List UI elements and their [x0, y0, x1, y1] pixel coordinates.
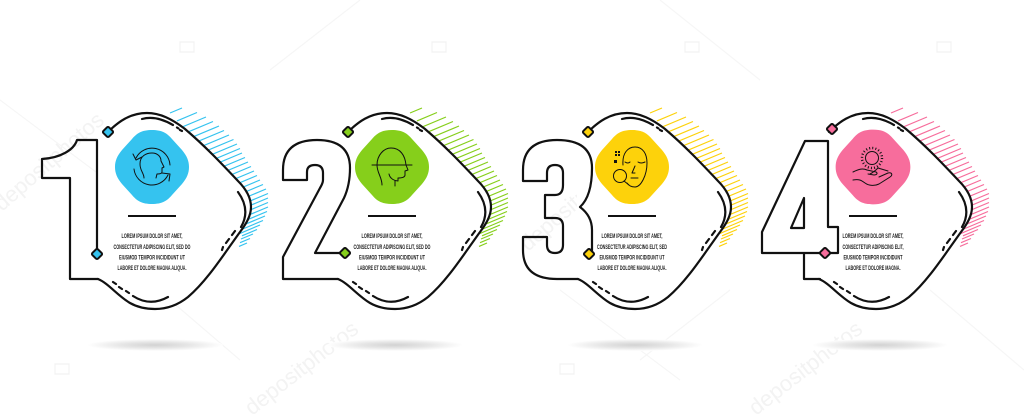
- divider: [849, 215, 897, 217]
- text block: LABORE ET DOLORE MAGNA ALIQUA.: [598, 266, 667, 272]
- text block: LABORE ET DOLORE MAGNA.: [846, 266, 901, 272]
- text block: CONSECTETUR ADIPISCING ELIT,: [842, 245, 904, 251]
- watermark: depositphotos: [515, 147, 635, 256]
- number 1: [42, 140, 98, 279]
- text block: LOREM IPSUM DOLOR SIT AMET,: [362, 234, 423, 240]
- ground shadow 1: [87, 339, 223, 351]
- ground shadow 4: [812, 339, 948, 351]
- number 3: [523, 140, 592, 279]
- icon: face rotation: [115, 130, 189, 204]
- text block: CONSECTETUR ADIPISCING ELIT, SED DO: [354, 245, 431, 251]
- text block: [597, 234, 667, 272]
- panel: step 2: [283, 108, 508, 309]
- icon: sun over hand: [836, 130, 910, 204]
- blob outline: [577, 113, 731, 309]
- icon: face with magnifier: [595, 130, 669, 204]
- panel: step 4: [762, 108, 989, 309]
- blob outline: [818, 113, 972, 309]
- number 2: [283, 140, 350, 279]
- watermark: depositphotos: [240, 316, 363, 418]
- connector dot top: [826, 123, 838, 135]
- text block: LABORE ET DOLORE MAGNA ALIQUA.: [118, 266, 187, 272]
- connector dot bottom: [819, 247, 831, 259]
- text block: CONSECTETUR ADIPISCING ELIT, SED DO: [114, 245, 191, 251]
- connector dot top: [102, 126, 114, 138]
- blob outline: [337, 113, 491, 309]
- text block: EIUSMOD TEMPOR INCIDIDUNT UT: [359, 256, 425, 262]
- text block: [114, 234, 191, 272]
- blob outline: [97, 113, 251, 309]
- text block: EIUSMOD TEMPOR INCIDIDUNT: [844, 256, 903, 262]
- ground shadow 3: [567, 339, 703, 351]
- hatching: pink: [891, 108, 989, 246]
- connector dot bottom: [583, 248, 595, 260]
- divider: [128, 215, 176, 217]
- hatching: blue: [170, 108, 268, 246]
- panel: step 1: [42, 108, 268, 309]
- text block: LOREM IPSUM DOLOR SIT AMET,: [122, 234, 183, 240]
- connector dot top: [342, 126, 354, 138]
- divider: [608, 215, 656, 217]
- hatching: green: [410, 108, 508, 246]
- connector dot bottom: [339, 247, 351, 259]
- text block: EIUSMOD TEMPOR INCIDIDUNT UT: [119, 256, 185, 262]
- panel: step 3: [523, 108, 748, 309]
- number 4: [762, 141, 838, 279]
- divider: [368, 215, 416, 217]
- connector dot bottom: [91, 248, 103, 260]
- text block: [842, 234, 904, 272]
- hatching: yellow: [650, 108, 748, 246]
- icon: head scan: [355, 130, 429, 204]
- watermark: depositphotos: [744, 316, 867, 418]
- text block: LABORE ET DOLORE MAGNA ALIQUA.: [358, 266, 427, 272]
- connector dot top: [582, 126, 594, 138]
- text block: LOREM IPSUM DOLOR SIT AMET,: [842, 234, 904, 240]
- text block: CONSECTETUR ADIPISCING ELIT, SED: [597, 245, 667, 251]
- text block: [354, 234, 431, 272]
- text block: EIUSMOD TEMPOR INCIDIDUNT UT: [600, 256, 665, 262]
- ground shadow 2: [327, 339, 463, 351]
- text block: LOREM IPSUM DOLOR SIT AMET,: [602, 234, 663, 240]
